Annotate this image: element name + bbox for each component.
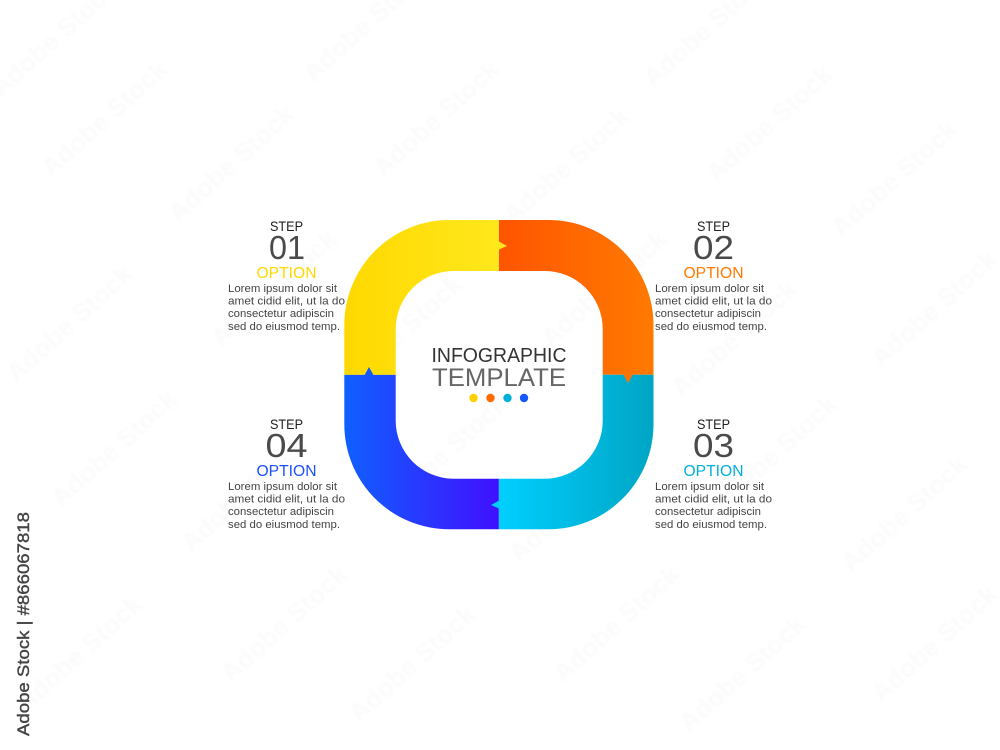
segment: blue step 04 bbox=[344, 375, 499, 529]
watermark pattern: Adobe Stock bbox=[665, 274, 803, 403]
text block: step 04: 04 bbox=[266, 427, 308, 464]
watermark pattern: Adobe Stock bbox=[700, 59, 838, 188]
watermark pattern: Adobe Stock bbox=[205, 224, 343, 353]
watermark pattern: Adobe Stock bbox=[497, 101, 635, 230]
text block: step 03: amet cidid elit, ut la do bbox=[655, 494, 772, 506]
watermark pattern: Adobe Stock bbox=[45, 384, 183, 513]
segment: yellow step 01 bbox=[344, 220, 499, 375]
watermark pattern: Adobe Stock bbox=[825, 114, 963, 243]
watermark pattern: Adobe Stock bbox=[865, 244, 1000, 373]
text block: step 02 bbox=[655, 218, 772, 333]
watermark pattern: Adobe Stock bbox=[835, 449, 973, 578]
watermark pattern: Adobe Stock bbox=[503, 439, 641, 568]
watermark pattern: Adobe Stock bbox=[705, 389, 843, 518]
watermark pattern: Adobe Stock bbox=[162, 99, 300, 228]
text block: step 01: consectetur adipiscin bbox=[228, 308, 334, 320]
segment: teal step 03 bbox=[499, 375, 654, 529]
text block: step 03: Lorem ipsum dolor sit bbox=[655, 481, 764, 493]
text block: step 01: 01 bbox=[269, 229, 305, 266]
watermark pattern: Adobe Stock bbox=[330, 269, 468, 398]
text block: step 02: Lorem ipsum dolor sit bbox=[655, 283, 764, 295]
text block: step 03: STEP bbox=[697, 416, 730, 432]
watermark pattern: Adobe Stock bbox=[35, 54, 173, 183]
watermark pattern: Adobe Stock bbox=[547, 559, 685, 688]
watermark pattern: Adobe Stock bbox=[865, 579, 1000, 708]
stock id side label: Adobe Stock | #866067818 bbox=[14, 512, 33, 736]
text block: step 01: OPTION bbox=[256, 265, 316, 282]
rounded ring chart bbox=[344, 220, 654, 529]
watermark pattern: Adobe Stock bbox=[367, 54, 505, 183]
text block: step 04 bbox=[228, 416, 345, 531]
arrow tip: yellow into orange bbox=[498, 241, 507, 250]
text block: step 04: amet cidid elit, ut la do bbox=[228, 494, 345, 506]
text block: step 02: amet cidid elit, ut la do bbox=[655, 296, 772, 308]
text block: step 03: sed do eiusmod temp. bbox=[655, 519, 767, 531]
text block: step 04: Lorem ipsum dolor sit bbox=[228, 481, 337, 493]
text block: step 02: OPTION bbox=[684, 265, 744, 282]
arrow tip: blue into yellow bbox=[364, 367, 374, 376]
segment: orange step 02 bbox=[499, 220, 654, 375]
text block: step 01: STEP bbox=[270, 218, 303, 234]
text block: step 03: OPTION bbox=[684, 463, 744, 480]
arrow tip: cyan into purple bbox=[491, 500, 500, 509]
title line: template: TEMPLATE bbox=[432, 364, 566, 392]
text block: step 03 bbox=[655, 416, 772, 531]
text block: step 02: sed do eiusmod temp. bbox=[655, 321, 767, 333]
text block: step 01: amet cidid elit, ut la do bbox=[228, 296, 345, 308]
watermark pattern: Adobe Stock bbox=[343, 599, 481, 728]
text block: step 02: STEP bbox=[697, 218, 730, 234]
watermark pattern: Adobe Stock bbox=[215, 559, 353, 688]
watermark pattern: Adobe Stock bbox=[175, 429, 313, 558]
watermark pattern: Adobe Stock bbox=[10, 589, 148, 718]
center title bbox=[432, 345, 566, 402]
text block: step 03: consectetur adipiscin bbox=[655, 506, 761, 518]
text block: step 02: consectetur adipiscin bbox=[655, 308, 761, 320]
watermark pattern: Adobe Stock bbox=[673, 609, 811, 738]
text block: step 01: sed do eiusmod temp. bbox=[228, 321, 340, 333]
text block: step 01 bbox=[228, 218, 345, 333]
watermark pattern: Adobe Stock bbox=[535, 224, 673, 353]
text block: step 04: OPTION bbox=[256, 463, 316, 480]
title line: infographic: INFOGRAPHIC bbox=[432, 345, 566, 367]
text block: step 01: Lorem ipsum dolor sit bbox=[228, 283, 337, 295]
text block: step 02: 02 bbox=[693, 229, 734, 266]
watermark pattern: Adobe Stock bbox=[0, 259, 138, 388]
watermark pattern: Adobe Stock bbox=[375, 389, 513, 518]
text block: step 04: sed do eiusmod temp. bbox=[228, 519, 340, 531]
text block: step 03: 03 bbox=[693, 427, 734, 464]
text block: step 04: consectetur adipiscin bbox=[228, 506, 334, 518]
text block: step 04: STEP bbox=[270, 416, 303, 432]
arrow tip: orange into teal bbox=[623, 374, 633, 383]
color dots bbox=[469, 394, 528, 402]
